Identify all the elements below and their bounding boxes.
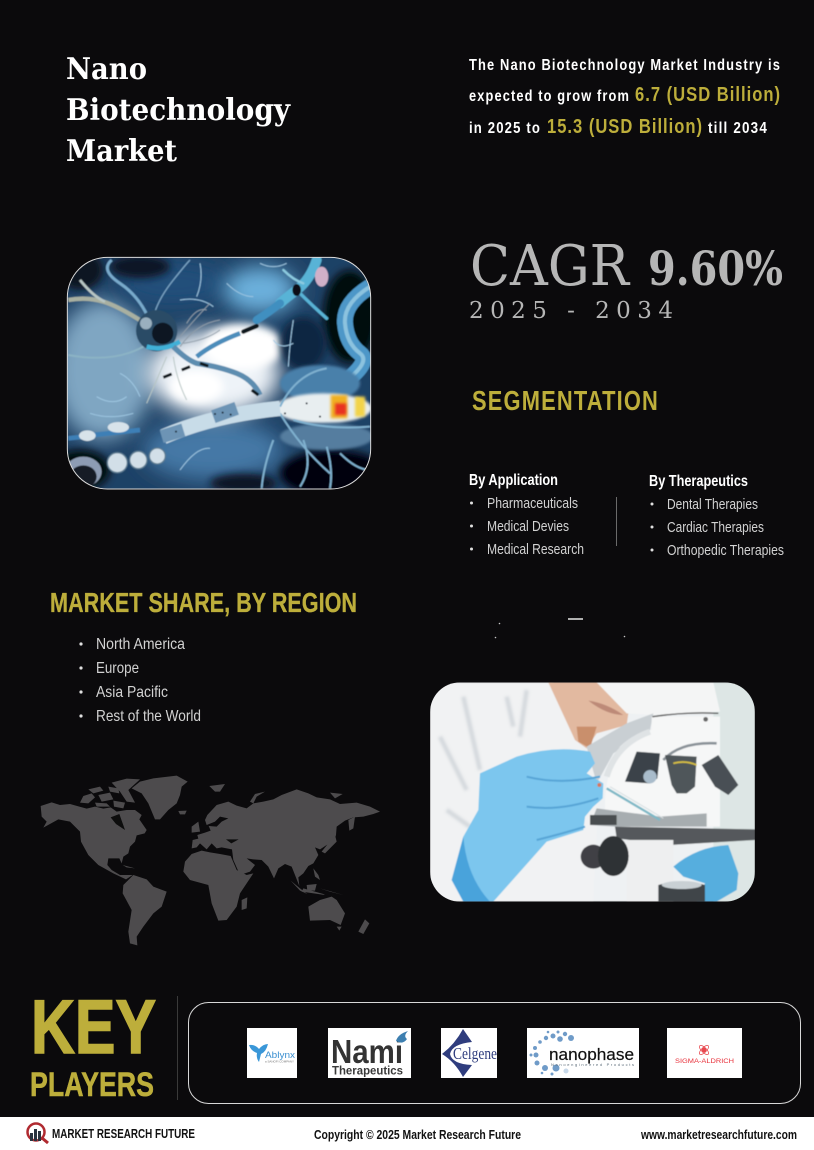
logo: Sigma-Aldrich [667,1028,742,1078]
CAGR value: 9.60% [648,242,783,297]
Africa [183,851,253,921]
logo: Nami Therapeutics: Therapeutics [332,1066,403,1078]
big axon right [333,287,370,390]
Australia [308,897,345,925]
region list: North America [96,636,185,653]
market forecast text: 15.3 (USD Billion) [547,116,703,138]
regional heading: MARKET SHARE, BY REGION [50,587,357,618]
CAGR value: CAGR [470,234,631,299]
title: Nano [66,52,147,87]
key players label: KEY [31,985,156,1070]
world map [41,776,380,945]
segmentation: by therapeutics: Orthopedic Therapies [667,542,784,559]
segmentation: by application: By Application [469,472,558,489]
region list: Asia Pacific [96,684,168,701]
branch cluster [280,365,360,402]
footer: Copyright © 2025 Market Research Future [314,1127,521,1142]
footer [0,1117,814,1150]
title [66,52,291,169]
market forecast text: in 2025 to [469,120,541,137]
photo: microscope [430,682,755,902]
logo: Celgene [441,1028,497,1078]
photo: neurons [66,256,372,490]
segmentation: by application: Pharmaceuticals [487,495,578,512]
logo: Celgene: Celgene [453,1044,497,1063]
South America [123,875,167,945]
Eurasia [192,789,380,886]
title: Biotechnology [66,93,291,128]
microscope body [651,716,720,827]
region list [79,636,201,725]
market forecast text: expected to grow from [469,88,630,105]
segmentation: by therapeutics: By Therapeutics [649,473,748,490]
logo: Ablynx [247,1028,297,1078]
soma and dendrites [68,260,220,403]
islands [209,784,225,792]
logos panel [188,1002,800,1104]
CAGR value [469,234,783,324]
Arctic islands [112,779,140,803]
fine dendrites [90,263,293,470]
segmentation: by application: Medical Research [487,541,584,558]
footer logo icon [28,1124,48,1143]
logo: nanophase: nanophase [549,1045,634,1064]
segmentation: by application [469,472,584,558]
region list: Rest of the World [96,708,201,725]
left glove [452,749,603,902]
footer: MARKET RESEARCH FUTURE [52,1126,195,1141]
CAGR value: 2025 - 2034 [469,298,673,324]
market forecast text: till 2034 [708,120,768,137]
key players label: PLAYERS [30,1066,154,1104]
top right cell [257,260,327,320]
North America [41,802,147,879]
segmentation: by therapeutics: Dental Therapies [667,496,758,513]
segmentation heading: SEGMENTATION [472,385,659,416]
logo: nanophase: Nanoengineered Products [551,1062,634,1067]
right glove [673,845,738,902]
region list: Europe [96,660,139,677]
lower body [627,840,673,902]
logo: nanophase [527,1028,639,1078]
beads [107,448,165,473]
logo: Ablynx: a SANOFI COMPANY [265,1060,294,1064]
logo: Ablynx: Ablynx [265,1050,295,1061]
logo: Nami Therapeutics: Nami [331,1033,403,1070]
segmentation: by therapeutics: Cardiac Therapies [667,519,764,536]
myelinated axon [173,347,260,395]
segmentation: by therapeutics [649,473,784,559]
logo: Sigma-Aldrich: SIGMA-ALDRICH [675,1058,734,1065]
stage [590,808,707,827]
Greenland [132,776,188,819]
key players label [30,985,156,1104]
objectives [625,752,660,783]
market forecast text [469,57,781,138]
segmentation: by application: Medical Devies [487,518,569,535]
main axon [163,408,280,437]
title: Market [66,134,177,169]
market forecast text: 6.7 (USD Billion) [635,84,781,106]
